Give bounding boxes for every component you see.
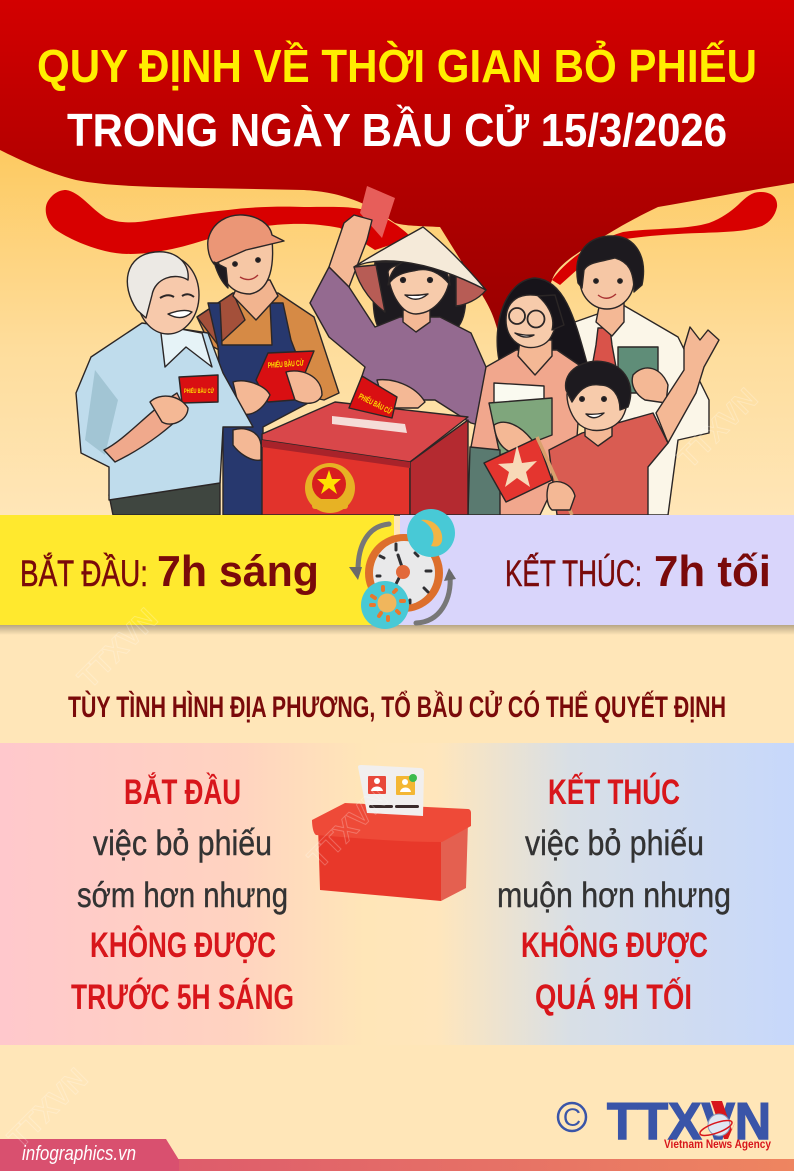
time band shadow [0, 625, 794, 635]
left ribbon [46, 190, 412, 254]
icon: clock with sun and moon [349, 509, 456, 629]
footer strip [0, 1159, 794, 1171]
band: end time [400, 515, 794, 625]
panel text: start rule [71, 772, 294, 1017]
logo: TTXVN Vietnam News Agency: Vietnam News Agency [664, 1139, 772, 1151]
flag [484, 437, 572, 515]
panel: gradient background [0, 743, 794, 1045]
person: old man in blue shirt: PHIẾU BẦU CỬ [184, 388, 214, 395]
person: boy with flag [484, 327, 719, 515]
person: woman in conical hat [310, 186, 486, 427]
band: end time: 7h tối [654, 547, 771, 596]
illustration: voters around a ballot box [76, 186, 719, 515]
copyright symbol [558, 1103, 586, 1132]
watermarks [2, 382, 764, 1155]
ballot box [262, 376, 468, 515]
copyright symbol: C [563, 1104, 581, 1132]
band: start time: BẮT ĐẦU: [20, 552, 148, 594]
band: start time [0, 515, 394, 625]
title: TRONG NGÀY BẦU CỬ 15/3/2026 [67, 104, 727, 156]
icon: small red ballot box [312, 765, 471, 901]
panel text: start rule: TRƯỚC 5H SÁNG [71, 977, 294, 1017]
band: end time: KẾT THÚC: [505, 553, 642, 594]
person: worker with helmet [197, 215, 339, 515]
watermarks: TTXVN [2, 1062, 94, 1155]
panel text: end rule: QUÁ 9H TỐI [535, 977, 692, 1017]
person: worker with helmet: PHIẾU BẦU CỬ [267, 357, 304, 370]
right ribbon [552, 192, 777, 285]
panel text: end rule [497, 772, 731, 1017]
panel text: start rule: sớm hơn nhưng [77, 876, 288, 915]
ballot box: PHIẾU BẦU CỬ [357, 391, 394, 416]
watermarks: TTXVN [672, 382, 764, 475]
panel text: start rule: việc bỏ phiếu [93, 824, 272, 863]
icon: national emblem [305, 463, 355, 513]
watermarks: TTXVN [302, 782, 394, 875]
band: start time: 7h sáng [157, 547, 319, 596]
panel text: start rule: BẮT ĐẦU [124, 772, 241, 812]
panel text: start rule: KHÔNG ĐƯỢC [90, 925, 276, 965]
illustration background [0, 140, 794, 520]
panel text: end rule: muộn hơn nhưng [497, 876, 731, 915]
red header banner [0, 0, 794, 345]
person: old man in blue shirt [76, 252, 261, 515]
person: woman with glasses [468, 278, 587, 515]
watermarks: TTXVN [72, 602, 164, 695]
footer tab with site name: infographics.vn [22, 1143, 136, 1165]
logo: TTXVN Vietnam News Agency: TTXVN [607, 1093, 771, 1151]
panel text: end rule: KẾT THÚC [548, 772, 680, 812]
title [37, 40, 757, 156]
panel text: end rule: việc bỏ phiếu [525, 824, 704, 863]
footer tab with site name [0, 1139, 179, 1171]
panel text: end rule: KHÔNG ĐƯỢC [521, 925, 708, 965]
person: man in white shirt [572, 236, 709, 515]
